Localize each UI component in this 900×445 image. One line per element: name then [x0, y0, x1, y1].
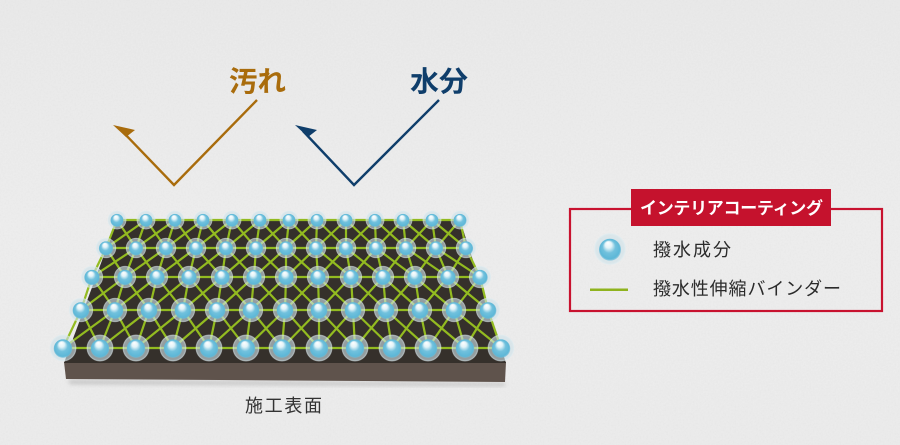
water-repellent particles [50, 210, 514, 362]
legend frame [570, 209, 882, 311]
label: water: 水分 [410, 66, 468, 97]
legend panel [570, 189, 882, 311]
arrow: water repelled [295, 100, 439, 185]
coated surface diagram [50, 210, 514, 386]
legend icon: binder line [590, 288, 628, 291]
arrow: dirt repelled [113, 100, 257, 185]
binder lines [63, 220, 501, 348]
plate side [64, 362, 506, 382]
legend text: binder: 撥水性伸縮バインダー [653, 279, 841, 299]
plate top [64, 220, 506, 363]
caption: treated surface: 施工表面 [245, 396, 322, 416]
legend title badge: インテリアコーティング [640, 198, 823, 218]
plate shadow [68, 380, 506, 386]
legend title badge [631, 189, 831, 226]
label: dirt: 汚れ [229, 66, 286, 97]
legend text: particle: 撥水成分 [653, 240, 731, 260]
legend icon: particle [594, 233, 626, 265]
